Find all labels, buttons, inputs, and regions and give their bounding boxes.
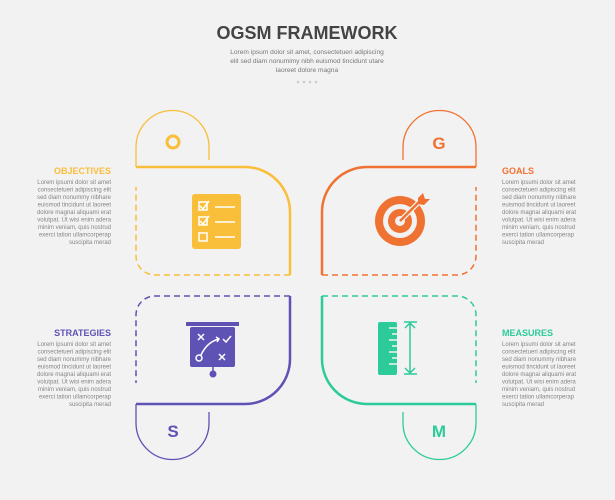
text block: objectives: minim veniam, quis nostrud <box>38 225 111 231</box>
text block: objectives: euismod tincidunt ut laoreet <box>38 202 111 208</box>
text block: strategies: minim veniam, quis nostrud <box>38 387 111 393</box>
text block: goals: GOALS <box>502 166 534 176</box>
text block: goals: sed diam nonummy nibhare <box>502 195 577 201</box>
text block: strategies: consectetueri adipiscing elit <box>38 350 111 356</box>
text block: measures: exerci tation ullamcorperap <box>502 394 575 400</box>
panel: measures <box>322 296 476 460</box>
text block: measures: dolore magnai aliquami erat <box>502 372 576 378</box>
text block: strategies: exerci tation ullamcorperap <box>39 394 112 400</box>
text block: goals: dolore magnai aliquami erat <box>502 210 576 216</box>
panel: goals <box>322 110 476 275</box>
text block: strategies: volutpat. Ut wisi enim adera <box>37 380 112 386</box>
text block: objectives: dolore magnai aliquami erat <box>37 210 111 216</box>
text block: objectives: suscipita merad <box>69 240 111 246</box>
text block: strategies: suscipita merad <box>69 402 111 408</box>
text block: objectives: sed diam nonummy nibhare <box>37 195 112 201</box>
icon: checklist <box>192 194 241 249</box>
text block: objectives <box>37 166 112 246</box>
panel: objectives <box>136 110 290 275</box>
subtitle: laoreet dolore magna <box>276 67 338 74</box>
text block: goals: Lorem ipsumi dolor sit amet <box>502 180 576 186</box>
icon: target <box>375 193 430 246</box>
text block: goals: exerci tation ullamcorperap <box>502 232 575 238</box>
text block: measures: volutpat. Ut wisi enim adera <box>502 380 576 386</box>
subtitle: elit sed diam nonumimy nibh euismod tincidunt utare <box>230 58 384 65</box>
panel: strategies <box>136 296 290 460</box>
subtitle <box>230 49 384 74</box>
text block: measures <box>502 328 577 408</box>
text block: objectives: volutpat. Ut wisi enim adera <box>37 218 112 224</box>
text block: strategies: STRATEGIES <box>54 328 111 338</box>
text block: goals <box>502 166 577 246</box>
text block: goals: suscipita merad <box>502 240 544 246</box>
subtitle: Lorem ipsum dolor sit amet, consectetueri adipiscing <box>230 49 384 56</box>
text block: strategies: sed diam nonummy nibhare <box>37 357 112 363</box>
icon: ruler <box>378 322 417 375</box>
text block: goals: euismod tincidunt ut laoreet <box>502 202 576 208</box>
text block: objectives: exerci tation ullamcorperap <box>39 232 112 238</box>
title: OGSM FRAMEWORK <box>217 23 397 43</box>
text block: strategies <box>37 328 112 408</box>
text block: measures: MEASURES <box>502 328 553 338</box>
icon: strategy board <box>186 322 239 378</box>
text block: goals: consectetueri adipiscing elit <box>502 188 576 194</box>
text block: objectives: Lorem ipsumi dolor sit amet <box>37 180 111 186</box>
text block: measures: suscipita merad <box>502 402 544 408</box>
text block: goals: volutpat. Ut wisi enim adera <box>502 218 576 224</box>
S letter: S <box>167 422 179 441</box>
dots <box>297 81 317 83</box>
text block: measures: consectetueri adipiscing elit <box>502 350 576 356</box>
text block: objectives: OBJECTIVES <box>54 166 111 176</box>
text block: measures: Lorem ipsumi dolor sit amet <box>502 342 576 348</box>
text block: strategies: Lorem ipsumi dolor sit amet <box>37 342 111 348</box>
text block: strategies: euismod tincidunt ut laoreet <box>38 364 111 370</box>
text block: measures: sed diam nonummy nibhare <box>502 357 577 363</box>
text block: strategies: dolore magnai aliquami erat <box>37 372 111 378</box>
text block: measures: euismod tincidunt ut laoreet <box>502 364 576 370</box>
text block: objectives: consectetueri adipiscing elit <box>38 188 111 194</box>
G letter: G <box>432 134 446 153</box>
M letter: M <box>432 422 446 441</box>
text block: goals: minim veniam, quis nostrud <box>502 225 575 231</box>
text block: measures: minim veniam, quis nostrud <box>502 387 575 393</box>
